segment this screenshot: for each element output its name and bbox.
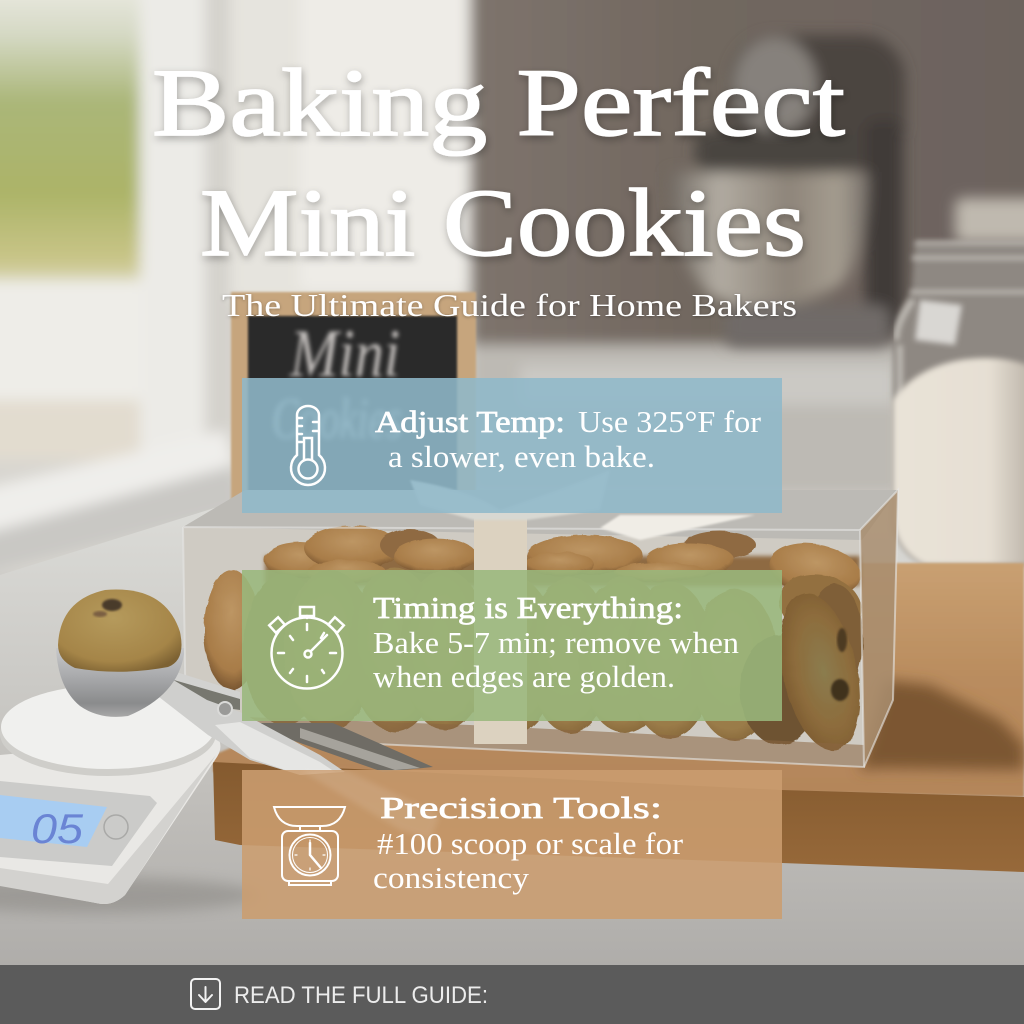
icon: thermometer	[291, 406, 325, 485]
call to action text: READ THE FULL GUIDE:	[234, 982, 488, 1009]
title: Baking Perfect	[152, 49, 845, 156]
title	[152, 49, 845, 276]
icon: stopwatch	[269, 607, 344, 688]
precision tools text: consistency	[373, 860, 530, 895]
icon: download	[191, 979, 220, 1009]
adjust temp text: Adjust Temp:	[375, 404, 565, 439]
cookie scoop	[56, 590, 433, 775]
back row of cookies	[264, 526, 756, 584]
wooden cutting board	[213, 563, 1024, 872]
timing text: when edges are golden.	[373, 659, 675, 694]
chalkboard sign: Cookies	[272, 386, 402, 451]
stand mixer	[668, 35, 1024, 347]
chalkboard sign: Mini	[289, 315, 400, 391]
title: Mini Cookies	[200, 169, 806, 276]
footer bar	[0, 965, 1024, 1024]
marble counter	[0, 500, 1024, 965]
note card	[600, 515, 755, 540]
adjust temp text	[375, 404, 762, 474]
digital kitchen scale	[0, 685, 260, 913]
adjust temp text: Use 325°F for	[578, 404, 762, 439]
panel: precision tools	[242, 770, 782, 919]
ribbon	[474, 516, 527, 744]
timing text: Bake 5-7 min; remove when	[373, 625, 740, 660]
timing text	[373, 590, 740, 694]
flour jar	[893, 243, 1024, 565]
scale LCD display: 05	[31, 805, 84, 852]
precision tools text: #100 scoop or scale for	[377, 826, 684, 861]
panel: timing	[242, 570, 782, 721]
box floor reflection	[186, 715, 864, 767]
chalkboard sign	[231, 292, 476, 502]
blurred kitchen background	[0, 0, 1024, 580]
subtitle: The Ultimate Guide for Home Bakers	[222, 287, 797, 323]
panel: adjust temperature	[242, 378, 782, 513]
adjust temp text: a slower, even bake.	[388, 439, 655, 474]
cookie dough ball	[58, 590, 182, 672]
box edge highlights	[183, 527, 864, 767]
icon: kitchen scale	[274, 807, 345, 885]
scoop handle seen through panel	[300, 770, 440, 840]
ribbon bow	[410, 470, 610, 520]
standing front row of cookies	[204, 536, 873, 758]
timing text: Timing is Everything:	[373, 590, 683, 625]
scale LCD display	[0, 795, 107, 852]
precision tools text: Precision Tools:	[380, 790, 662, 825]
clear cookie box	[183, 470, 898, 767]
precision tools text	[373, 790, 684, 895]
